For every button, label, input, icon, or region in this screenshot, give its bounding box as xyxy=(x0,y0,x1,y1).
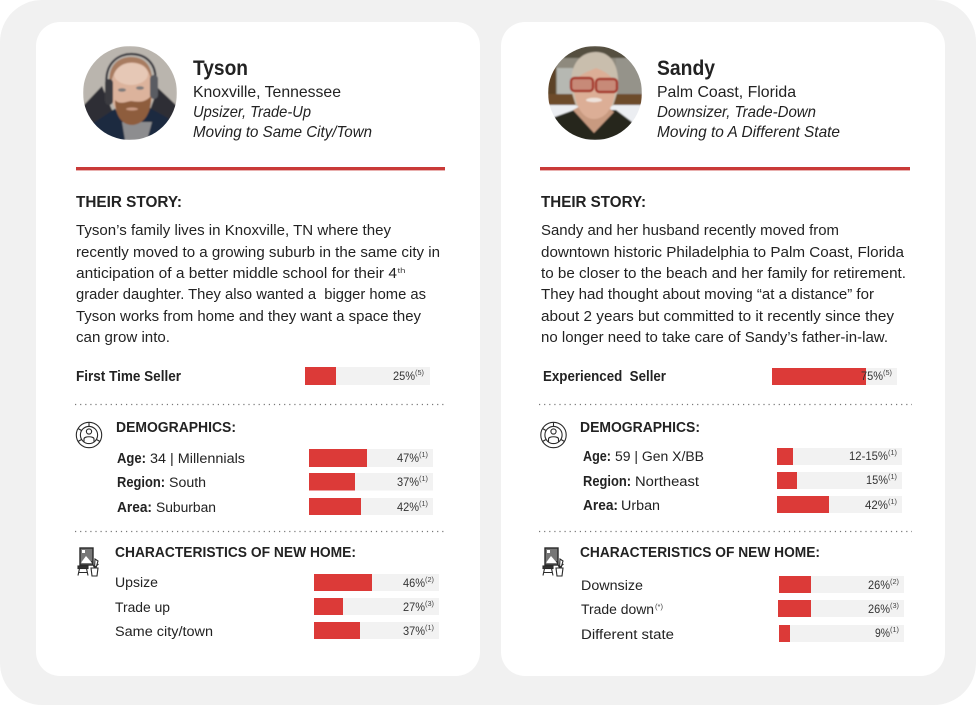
name and profile: Sandy: Moving to A Different State xyxy=(657,124,840,141)
row: trade down: Trade down xyxy=(581,602,654,618)
row: area: Urban xyxy=(621,498,660,514)
name and profile: Tyson: Knoxville, Tennessee xyxy=(193,84,341,101)
row: region xyxy=(117,473,433,491)
stat: experienced seller xyxy=(543,368,897,385)
stat: first time seller: 25% xyxy=(393,369,415,383)
name and profile: Sandy: Downsizer, Trade-Down xyxy=(657,104,816,121)
name and profile: Sandy: Sandy xyxy=(657,57,715,80)
icon: demographics xyxy=(76,422,102,448)
row: area: Area: xyxy=(117,500,152,516)
row: upsize xyxy=(115,574,439,591)
story text: Tyson: can grow into. xyxy=(76,329,170,346)
row: area: 42% xyxy=(865,498,888,512)
story text: Tyson: Tyson’s family lives in Knoxville, TN where they xyxy=(76,222,392,239)
row: trade down xyxy=(581,600,904,618)
row: region: 15% xyxy=(866,473,888,487)
row: trade down: (3) xyxy=(890,601,899,610)
row: same city/town: Same city/town xyxy=(115,624,213,640)
story text: Tyson: anticipation of a better middle school for their 4 xyxy=(76,265,397,282)
portrait: Sandy xyxy=(548,46,642,140)
icon: home interior xyxy=(78,548,98,576)
row: trade up: 27% xyxy=(403,600,425,614)
red divider xyxy=(540,167,910,170)
row: age: 59 | Gen X/BB xyxy=(615,449,704,465)
icon: demographics xyxy=(541,422,566,448)
heading: characteristics of new home: CHARACTERISTICS OF NEW HOME: xyxy=(580,545,820,561)
row: same city/town xyxy=(115,622,439,640)
row: downsize: Downsize xyxy=(581,578,643,594)
row: area xyxy=(117,498,433,516)
row: trade up: Trade up xyxy=(115,600,170,616)
icon: home interior xyxy=(543,548,564,576)
story text: Tyson: th xyxy=(398,266,406,275)
row: trade down: 26% xyxy=(868,602,890,616)
row: upsize: 46% xyxy=(403,576,425,590)
heading: demographics: DEMOGRAPHICS: xyxy=(580,420,700,436)
row: different state: 9% xyxy=(875,626,890,640)
name and profile: Tyson xyxy=(193,57,372,141)
heading: their story: THEIR STORY: xyxy=(541,194,646,211)
row: region: South xyxy=(169,475,206,491)
row: region: (1) xyxy=(419,474,428,483)
row: region: 37% xyxy=(397,475,419,489)
story text: Tyson: Tyson works from home and they want a space they xyxy=(76,308,421,325)
row: age: 47% xyxy=(397,451,419,465)
panel: Tyson xyxy=(36,22,480,676)
stat: first time seller: (5) xyxy=(415,368,424,377)
row: age: 34 | Millennials xyxy=(150,451,245,467)
heading: their story: THEIR STORY: xyxy=(76,194,182,211)
row: region: Region: xyxy=(583,474,631,490)
red divider xyxy=(76,167,445,170)
row: area xyxy=(583,496,902,514)
row: different state: (1) xyxy=(890,625,899,634)
row: area: Area: xyxy=(583,498,618,514)
row: trade up xyxy=(115,598,439,616)
name and profile: Tyson: Upsizer, Trade-Up xyxy=(193,104,311,121)
row: upsize: Upsize xyxy=(115,575,158,591)
row: age: (1) xyxy=(419,450,428,459)
row: downsize: 26% xyxy=(868,578,890,592)
row: age: Age: xyxy=(117,451,146,467)
name and profile: Tyson: Moving to Same City/Town xyxy=(193,124,372,141)
row: different state: Different state xyxy=(581,627,674,643)
heading: characteristics of new home: CHARACTERISTICS OF NEW HOME: xyxy=(115,545,356,561)
story text: Sandy: They had thought about moving “at a distance” for xyxy=(541,286,874,303)
row: trade down: (*) xyxy=(655,602,663,611)
story text: Sandy: Sandy and her husband recently moved from xyxy=(541,222,839,239)
name and profile: Tyson: Tyson xyxy=(193,57,248,80)
stat: experienced seller: 75% xyxy=(861,369,883,383)
story text: Sandy xyxy=(541,222,906,346)
name and profile: Sandy: Palm Coast, Florida xyxy=(657,84,796,101)
row: age: (1) xyxy=(888,448,897,457)
row: trade up: (3) xyxy=(425,599,434,608)
row: region: Northeast xyxy=(635,474,699,490)
row: age: Age: xyxy=(583,449,611,465)
stat: first time seller: First Time Seller xyxy=(76,369,181,385)
stat: experienced seller: (5) xyxy=(883,368,892,377)
story text: Sandy: about 2 years but committed to it recently since they xyxy=(541,308,894,325)
story text: Tyson: recently moved to a growing suburb in the same city in xyxy=(76,244,440,261)
row: age xyxy=(583,448,902,465)
row: region xyxy=(583,472,902,490)
row: same city/town: 37% xyxy=(403,624,425,638)
story text: Tyson: grader daughter. They also wanted a bigger home as xyxy=(76,286,426,303)
story text: Sandy: no longer need to take care of Sandy’s father-in-law. xyxy=(541,329,888,346)
row: downsize xyxy=(581,576,904,594)
row: upsize: (2) xyxy=(425,575,434,584)
row: age xyxy=(117,449,433,467)
name and profile: Sandy xyxy=(657,57,840,141)
row: region: Region: xyxy=(117,475,165,491)
row: area: (1) xyxy=(419,499,428,508)
row: area: Suburban xyxy=(156,500,216,516)
story text: Sandy: to be closer to the beach and her family for retirement. xyxy=(541,265,906,282)
heading: demographics: DEMOGRAPHICS: xyxy=(116,420,236,436)
row: region: (1) xyxy=(888,472,897,481)
story text: Sandy: downtown historic Philadelphia to Palm Coast, Florida xyxy=(541,244,905,261)
row: area: 42% xyxy=(397,500,419,514)
story text: Tyson xyxy=(76,222,440,346)
stat: first time seller xyxy=(76,367,430,385)
portrait: Tyson xyxy=(83,46,177,140)
row: same city/town: (1) xyxy=(425,623,434,632)
row: different state xyxy=(581,625,904,643)
row: downsize: (2) xyxy=(890,577,899,586)
row: area: (1) xyxy=(888,497,897,506)
stat: experienced seller: Experienced Seller xyxy=(543,369,666,385)
panel: Sandy xyxy=(501,22,945,676)
row: age: 12-15% xyxy=(849,449,888,463)
